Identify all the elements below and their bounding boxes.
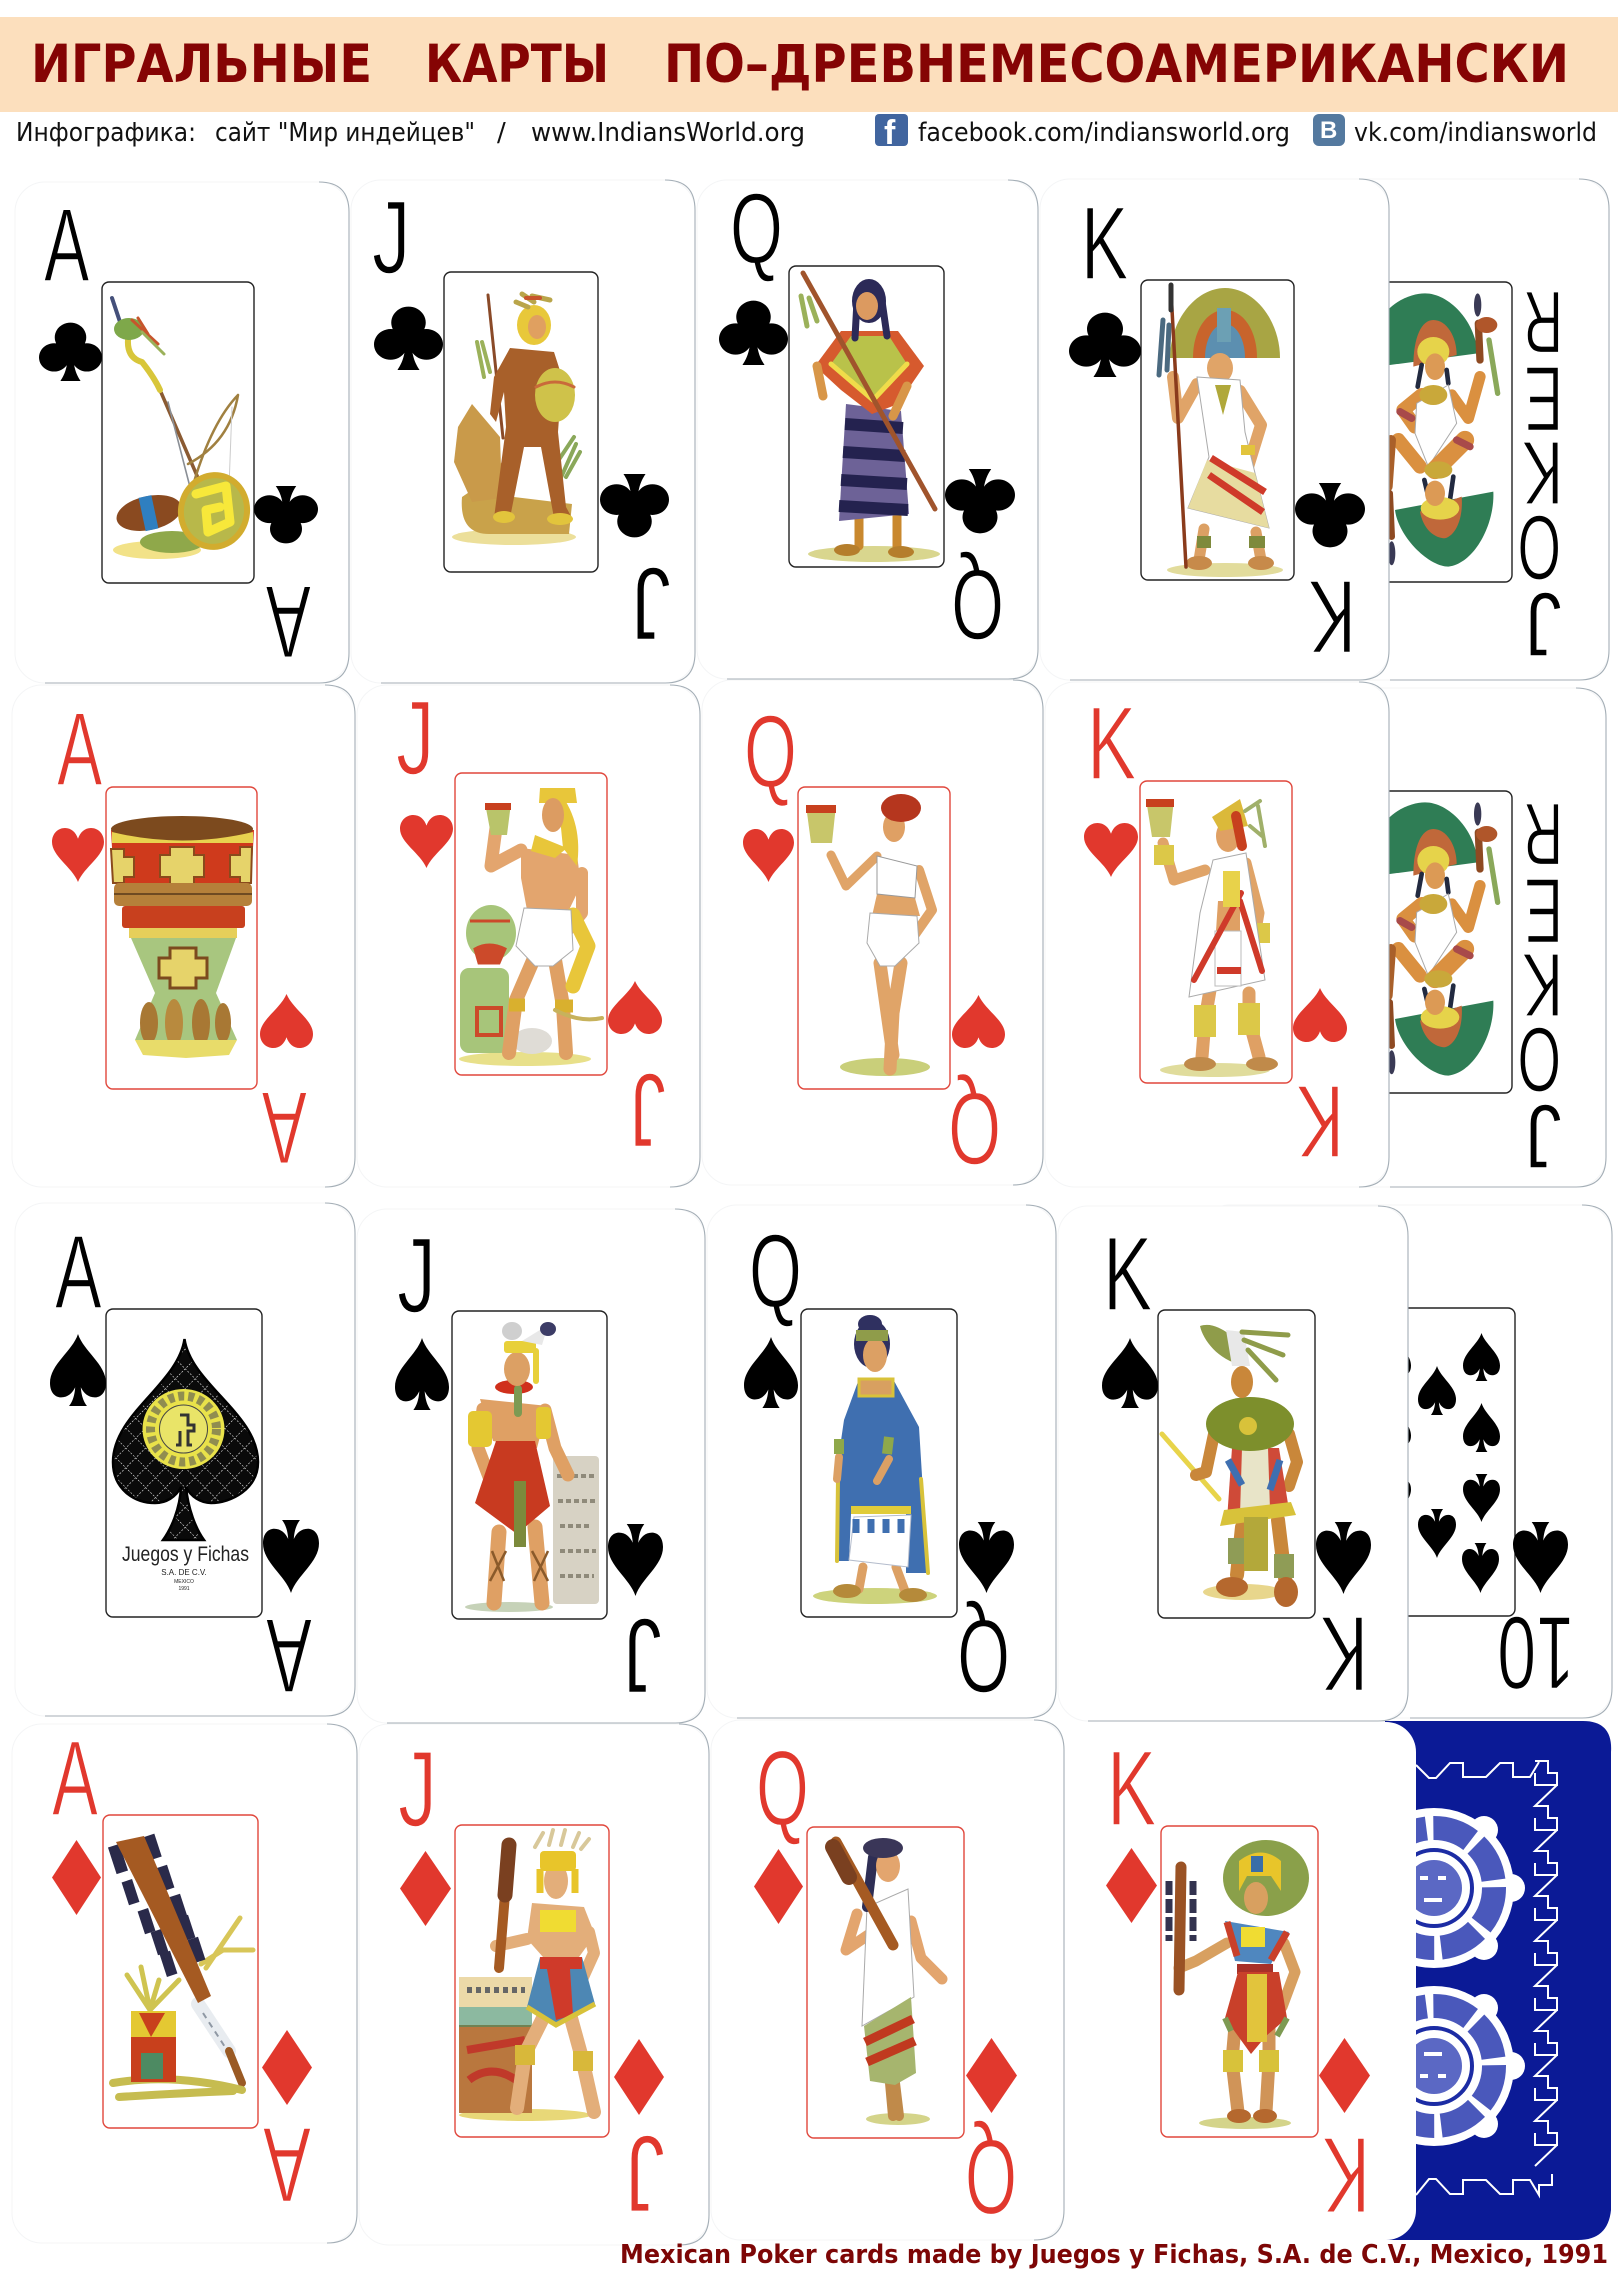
top index: J hearts bbox=[396, 679, 453, 868]
bottom index: J clubs: J bbox=[631, 546, 671, 662]
bottom index: K clubs: K bbox=[1309, 559, 1356, 676]
card sheet bbox=[707, 1205, 1056, 1718]
bottom index: Q clubs bbox=[945, 469, 1015, 659]
label: joker letters: O bbox=[1517, 1007, 1561, 1110]
top index: J spades: J bbox=[397, 1215, 436, 1335]
bottom index: K spades bbox=[1316, 1522, 1371, 1712]
top index: J clubs: J bbox=[372, 180, 410, 296]
illustration frame: woman with club bbox=[807, 1827, 964, 2138]
maker name: Juegos y Fichas bbox=[122, 1543, 249, 1566]
title banner bbox=[0, 17, 1618, 112]
sun stone, lower bbox=[1354, 1986, 1525, 2146]
bottom index: Q clubs: Q bbox=[951, 548, 1004, 659]
card sheet bbox=[697, 180, 1038, 679]
illustration frame: warrior in jaguar skin with idol bbox=[455, 773, 607, 1075]
card: king of diamonds bbox=[1066, 1722, 1416, 2240]
card sheet bbox=[15, 1203, 355, 1716]
bottom index: Q hearts bbox=[948, 995, 1005, 1185]
card: ace of hearts bbox=[12, 685, 355, 1187]
card sheet bbox=[1066, 1722, 1416, 2240]
illustration frame: ceremonial goblet bbox=[106, 787, 257, 1089]
icon: vk bbox=[1313, 114, 1345, 146]
card: ace of diamonds bbox=[12, 1720, 357, 2243]
top index: J diamonds: J bbox=[398, 1729, 437, 1849]
top index: K clubs: K bbox=[1081, 184, 1128, 301]
card: king of spades bbox=[1058, 1206, 1408, 1721]
top index: K clubs bbox=[1069, 184, 1141, 377]
card: jack of diamonds bbox=[359, 1724, 709, 2245]
illustration frame: king raising goblet bbox=[1140, 781, 1292, 1083]
card sheet bbox=[1200, 179, 1609, 680]
bottom index: K hearts: K bbox=[1297, 1064, 1344, 1179]
top index: K spades bbox=[1102, 1216, 1158, 1408]
bottom index: A clubs bbox=[254, 486, 318, 678]
bottom index: Q diamonds: Q bbox=[965, 2117, 1017, 2237]
label: joker letters bbox=[1517, 785, 1563, 1188]
top index: Q spades bbox=[744, 1212, 802, 1408]
card: queen of clubs bbox=[697, 174, 1038, 679]
bottom index: J diamonds bbox=[614, 2039, 665, 2234]
card: queen of hearts bbox=[702, 680, 1043, 1185]
bottom index: J spades bbox=[608, 1524, 663, 1716]
label: joker letters: R bbox=[1523, 273, 1563, 371]
bottom index: Q spades bbox=[957, 1522, 1014, 1715]
card: joker, row 1 bbox=[1200, 179, 1609, 680]
bottom index: Q hearts: Q bbox=[948, 1071, 1001, 1185]
label: joker letters: J bbox=[1524, 573, 1562, 676]
card sheet bbox=[357, 1209, 705, 1723]
card: ace of spades bbox=[15, 1203, 355, 1716]
illustration frame: king with club and feather helmet bbox=[1161, 1826, 1318, 2137]
top index: Q clubs: Q bbox=[730, 174, 783, 285]
credit line: www.IndiansWorld.org bbox=[531, 118, 805, 148]
bottom index: K diamonds: K bbox=[1323, 2114, 1370, 2235]
credit line: сайт "Мир индейцев" bbox=[215, 118, 475, 148]
illustration frame: double-headed warrior bbox=[1360, 791, 1512, 1093]
bottom index: K hearts bbox=[1293, 988, 1347, 1179]
facebook address: facebook.com/indiansworld.org bbox=[918, 118, 1290, 148]
card sheet bbox=[359, 1724, 709, 2245]
icon: facebook bbox=[875, 114, 908, 152]
label: joker letters: E bbox=[1524, 347, 1563, 450]
card back: blue with sun stones bbox=[1354, 1721, 1611, 2240]
bottom index: J diamonds: J bbox=[625, 2112, 665, 2234]
icon: vk: В bbox=[1320, 117, 1337, 144]
illustration frame: jaguar warrior on crocodile bbox=[444, 272, 598, 572]
bottom index: Q spades: Q bbox=[957, 1597, 1010, 1715]
top index: K hearts: K bbox=[1087, 686, 1136, 802]
label: joker letters: R bbox=[1523, 785, 1563, 883]
bottom index: J hearts bbox=[608, 981, 666, 1168]
sun stone, upper bbox=[1354, 1808, 1525, 1968]
illustration frame: woman raising goblet bbox=[798, 787, 950, 1089]
icon: facebook: f bbox=[884, 114, 896, 152]
bottom index: A spades bbox=[263, 1520, 319, 1715]
bottom index: A clubs: A bbox=[265, 564, 311, 678]
bottom index: Q diamonds bbox=[965, 2038, 1017, 2237]
illustration frame: double-headed warrior bbox=[1360, 282, 1512, 582]
bottom index: A hearts bbox=[260, 994, 313, 1184]
illustration frame: king with feather fan bbox=[1141, 280, 1294, 580]
card: jack of spades bbox=[357, 1209, 705, 1723]
bottom index: 10 spades: 10 bbox=[1497, 1595, 1575, 1711]
top index: A spades: A bbox=[55, 1213, 102, 1330]
card: queen of diamonds bbox=[711, 1720, 1064, 2240]
card sheet bbox=[702, 680, 1043, 1185]
illustration frame: woman in poncho with staff bbox=[789, 266, 944, 567]
illustration frame: warrior with club and temple bbox=[455, 1825, 609, 2137]
card: joker, row 2 bbox=[1200, 688, 1606, 1188]
illustration frame: spade pips bbox=[1359, 1308, 1515, 1616]
title banner: КАРТЫ bbox=[425, 34, 609, 95]
illustration frame: king with green collar and sceptre bbox=[1158, 1310, 1315, 1618]
card sheet bbox=[12, 1724, 357, 2243]
bottom index: J hearts: J bbox=[630, 1051, 666, 1168]
card: queen of spades bbox=[707, 1205, 1056, 1718]
top index: A diamonds bbox=[52, 1720, 101, 1915]
card: ten of spades bbox=[1200, 1205, 1612, 1718]
maker details: S.A. DE C.V. bbox=[161, 1568, 207, 1577]
card sheet bbox=[1040, 179, 1389, 680]
top index: Q diamonds bbox=[754, 1728, 809, 1924]
top index: K hearts bbox=[1084, 686, 1138, 877]
top index: Q hearts bbox=[743, 695, 797, 882]
label: joker letters: J bbox=[1524, 1085, 1562, 1188]
emblem: patterned spade bbox=[113, 1339, 258, 1540]
card: king of clubs bbox=[1040, 179, 1389, 680]
card sheet bbox=[711, 1720, 1064, 2240]
credit line: Инфографика: bbox=[16, 118, 196, 148]
top index: A clubs bbox=[39, 186, 102, 381]
top index: Q clubs bbox=[719, 174, 788, 365]
card sheet bbox=[1045, 682, 1389, 1187]
illustration frame: woman in blue dress bbox=[801, 1309, 957, 1617]
illustration frame: maker's spade emblem bbox=[106, 1309, 262, 1617]
card sheet bbox=[1385, 1721, 1611, 2240]
label: joker letters: E bbox=[1524, 859, 1563, 962]
maker details: MEXICO bbox=[174, 1579, 194, 1585]
vk address: vk.com/indiansworld bbox=[1354, 118, 1597, 148]
card sheet bbox=[1058, 1206, 1408, 1721]
card: jack of clubs bbox=[351, 180, 695, 683]
bottom index: K diamonds bbox=[1319, 2038, 1370, 2235]
top index: A hearts: A bbox=[57, 690, 103, 807]
top index: K spades: K bbox=[1103, 1216, 1152, 1333]
bottom index: K clubs bbox=[1295, 483, 1365, 676]
card: king of hearts bbox=[1045, 682, 1389, 1187]
label: joker letters: O bbox=[1517, 495, 1561, 598]
bottom index: A spades: A bbox=[266, 1596, 312, 1715]
top index: K diamonds: K bbox=[1107, 1730, 1156, 1848]
card sheet bbox=[357, 685, 700, 1187]
top index: A hearts bbox=[52, 690, 104, 882]
label: joker letters bbox=[1517, 273, 1563, 676]
card sheet bbox=[15, 182, 349, 683]
maker details bbox=[161, 1568, 207, 1592]
top index: A diamonds: A bbox=[52, 1720, 98, 1839]
illustration frame: warrior in red skirt with stele bbox=[452, 1311, 607, 1619]
top index: J diamonds bbox=[398, 1729, 451, 1926]
top index: K diamonds bbox=[1106, 1730, 1157, 1923]
credit line: / bbox=[497, 118, 506, 148]
card sheet bbox=[351, 180, 695, 683]
bottom index: K spades: K bbox=[1321, 1593, 1368, 1712]
top index: Q spades: Q bbox=[749, 1212, 802, 1330]
bottom index: A diamonds bbox=[262, 2030, 312, 2224]
top index: J spades bbox=[395, 1215, 449, 1410]
label: joker letters: K bbox=[1522, 934, 1563, 1035]
top index: Q diamonds: Q bbox=[756, 1728, 809, 1848]
card: jack of hearts bbox=[357, 679, 700, 1187]
top index: A clubs: A bbox=[44, 186, 90, 303]
illustration frame: staff, bow, quiver and shield bbox=[102, 282, 256, 583]
card sheet bbox=[1200, 688, 1606, 1187]
illustration frame: obsidian club with plant bbox=[103, 1815, 258, 2128]
card: ace of clubs bbox=[15, 182, 349, 683]
bottom index: A diamonds: A bbox=[263, 2105, 311, 2224]
meander border bbox=[1416, 1761, 1557, 2195]
bottom index: J spades: J bbox=[623, 1596, 662, 1716]
bottom index: 10 spades bbox=[1497, 1522, 1575, 1711]
credit line bbox=[16, 118, 805, 148]
top index: J hearts: J bbox=[396, 679, 434, 797]
label: joker letters: K bbox=[1522, 422, 1563, 523]
card sheet bbox=[12, 685, 355, 1187]
maker details: 1991 bbox=[178, 1586, 190, 1592]
bottom index: J clubs bbox=[600, 474, 671, 662]
top index: A spades bbox=[50, 1213, 106, 1406]
card sheet bbox=[1200, 1205, 1612, 1718]
top index: Q hearts: Q bbox=[744, 695, 797, 809]
title banner: ИГРАЛЬНЫЕ bbox=[31, 34, 372, 95]
bottom index: A hearts: A bbox=[261, 1070, 307, 1184]
top index: J clubs bbox=[372, 180, 443, 370]
